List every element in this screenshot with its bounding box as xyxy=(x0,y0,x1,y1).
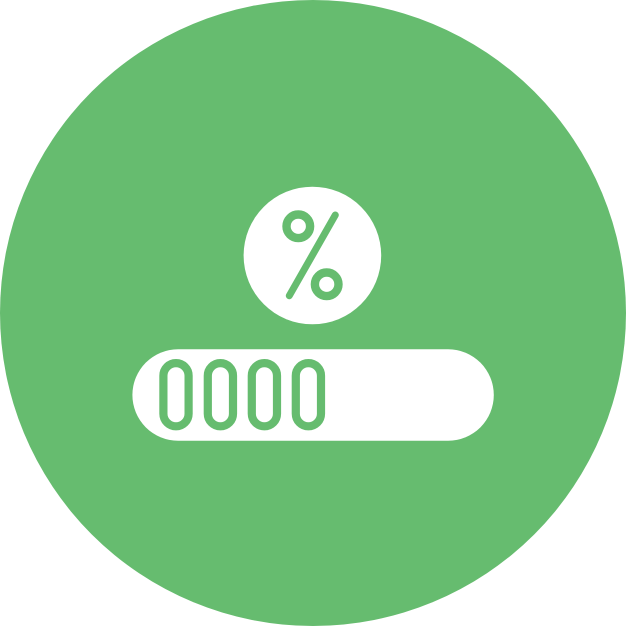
badge white circle xyxy=(244,187,381,324)
progress segments xyxy=(163,363,321,426)
icon: percent badge xyxy=(244,187,381,324)
progress bar xyxy=(132,349,494,441)
progress bar track xyxy=(132,349,494,441)
percent sign xyxy=(286,214,339,296)
